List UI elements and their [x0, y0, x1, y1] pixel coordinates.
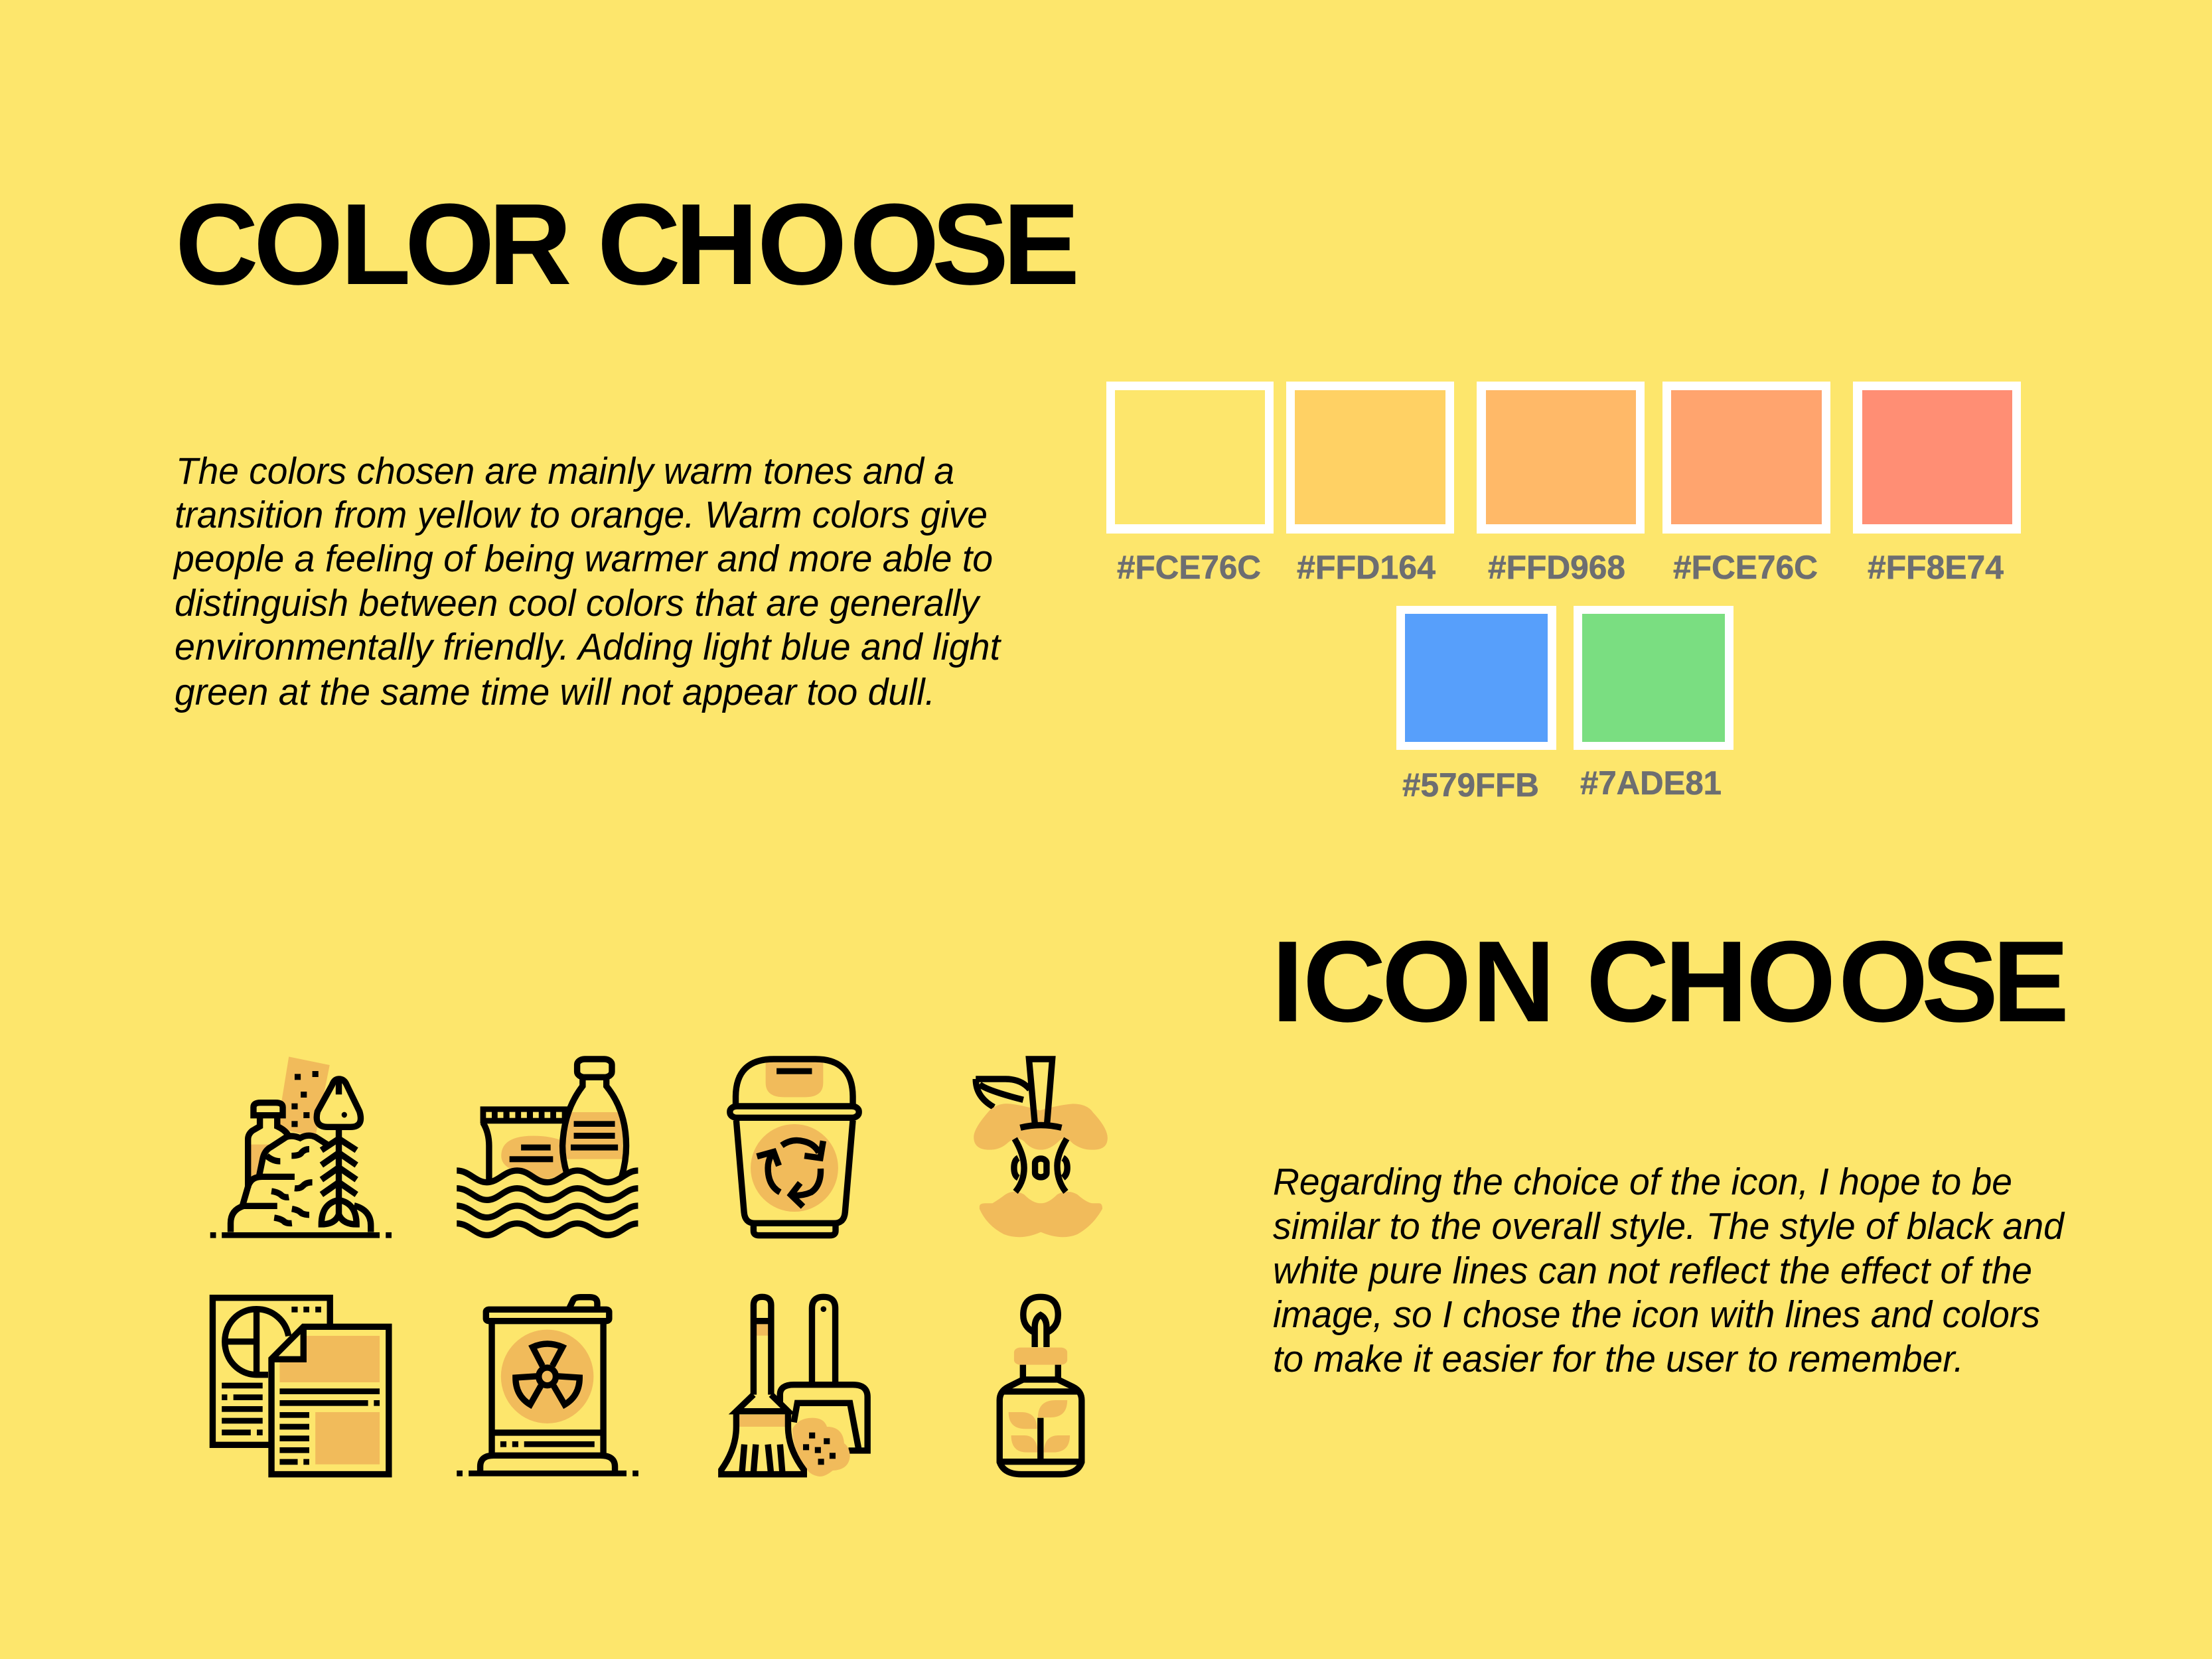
swatch: 579FFB: #579FFB	[1402, 766, 1539, 804]
swatch: 579FFB	[1396, 606, 1556, 804]
text block: icon explanation: white pure lines can not reflect the effect of the	[1273, 1250, 2032, 1292]
title: icon choose: ICON CHOOSE	[1272, 916, 2069, 1046]
text block: color explanation: environmentally friendly. Adding light blue and light	[175, 626, 1001, 668]
icon: bag and bottle in water	[457, 1059, 638, 1235]
swatch: 7ADE81: #7ADE81	[1580, 764, 1722, 802]
swatch: FFD968: #FFD968	[1488, 548, 1625, 586]
title: color choose: COLOR CHOOSE	[175, 179, 1080, 309]
text block: icon explanation	[1273, 1161, 2065, 1380]
text block: color explanation: transition from yellow to orange. Warm colors give	[175, 494, 988, 536]
swatch: FCE76C second	[1662, 382, 1830, 586]
swatch: FFD164: #FFD164	[1297, 548, 1436, 586]
text block: icon explanation: to make it easier for the user to remember.	[1273, 1338, 1964, 1380]
text block: icon explanation: Regarding the choice of the icon, I hope to be	[1273, 1161, 2012, 1203]
panel: colour swatches	[1106, 382, 2021, 804]
icon: broom and dustpan	[721, 1297, 867, 1477]
text block: icon explanation: image, so I chose the icon with lines and colors	[1273, 1294, 2040, 1336]
text block: color explanation: The colors chosen are mainly warm tones and a	[176, 451, 954, 492]
swatch: FCE76C	[1106, 382, 1274, 586]
swatch: FF8E74: #FF8E74	[1868, 548, 2004, 586]
text block: color explanation: distinguish between cool colors that are generally	[175, 583, 982, 624]
swatch: FFD164	[1286, 382, 1454, 586]
text block: color explanation: green at the same time will not appear too dull.	[175, 672, 935, 713]
text block: icon explanation: similar to the overall style. The style of black and	[1273, 1206, 2065, 1248]
swatch: FF8E74	[1853, 382, 2021, 586]
swatch: FFD968	[1477, 382, 1645, 586]
text block: color explanation	[173, 451, 1001, 713]
icon: apple core	[974, 1059, 1108, 1237]
swatch: 7ADE81	[1574, 606, 1733, 802]
panel: icon grid	[210, 1056, 1108, 1477]
icon: food waste pile	[210, 1056, 392, 1238]
swatch: FCE76C second: #FCE76C	[1673, 548, 1818, 586]
swatch: FCE76C: #FCE76C	[1117, 548, 1261, 586]
icon: recycling bin	[730, 1059, 859, 1236]
icon: radioactive barrel	[457, 1297, 638, 1477]
text block: color explanation: people a feeling of being warmer and more able to	[173, 538, 993, 580]
icon: plant in bottle	[999, 1297, 1082, 1475]
icon: documents	[212, 1298, 389, 1475]
